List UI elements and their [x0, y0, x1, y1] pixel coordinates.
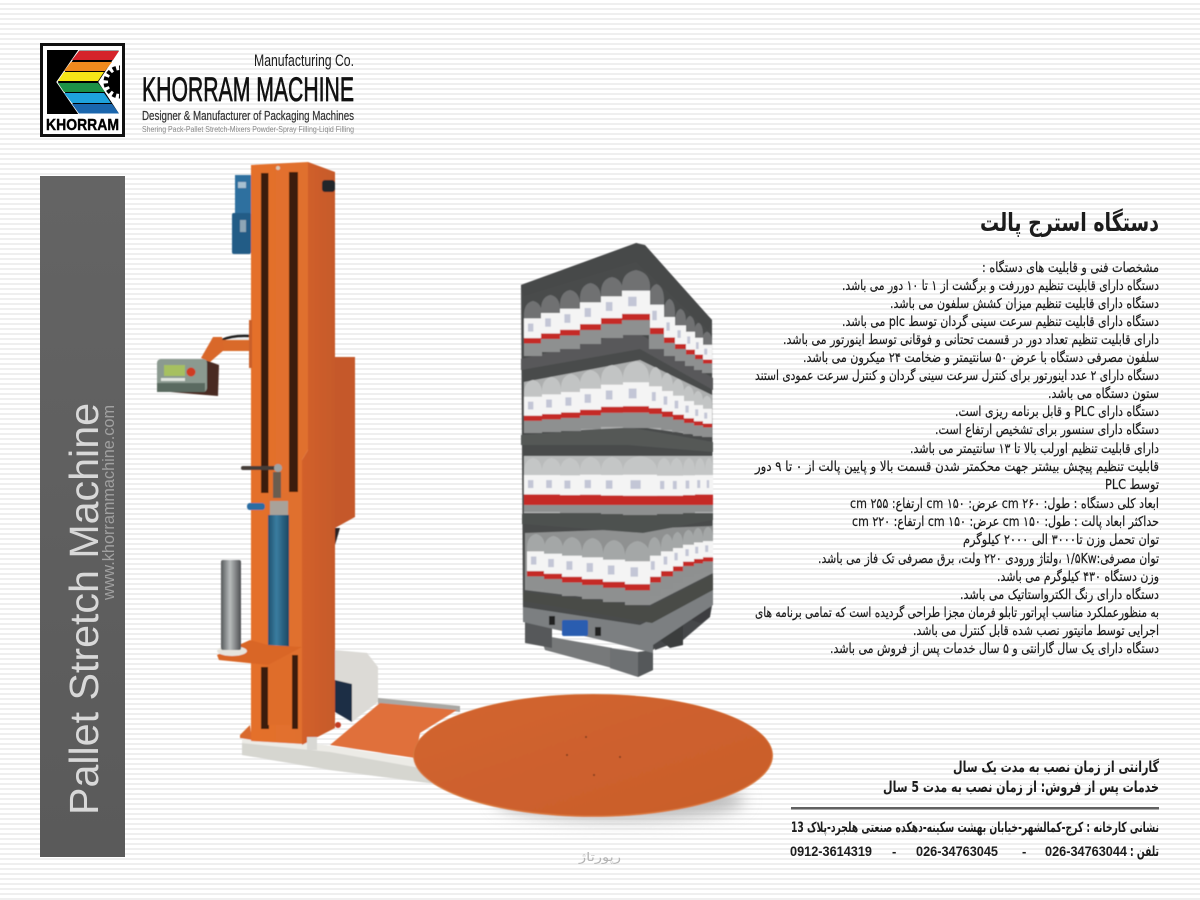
specifications text: دستگاه دارای PLC و قابل برنامه ریزی است.	[955, 403, 1159, 420]
company name block: Designer & Manufacturer of Packaging Machines	[142, 109, 354, 123]
base bracket	[307, 737, 317, 750]
vertical website: www.khorrammachine.com	[99, 405, 118, 601]
vertical title: Pallet Stretch Machine	[61, 403, 107, 815]
company name block: KHORRAM MACHINE	[142, 71, 354, 109]
pallet of bottles	[521, 243, 713, 677]
machine	[157, 162, 773, 820]
company name block	[142, 51, 354, 134]
warranty text	[883, 758, 1159, 797]
tension handle	[241, 464, 288, 515]
specifications text: دستگاه دارای ۲ عدد اینورتور برای کنترل سرعت سینی گردان و کنترل سرعت عمودی استند	[755, 367, 1159, 384]
phone numbers: -	[1022, 844, 1026, 859]
specifications text: توسط PLC	[1105, 477, 1159, 493]
specifications text: توان تحمل وزن تا۳۰۰۰ الی ۲۰۰۰ کیلوگرم	[963, 531, 1159, 548]
tray 5	[523, 575, 713, 623]
film roll	[268, 515, 289, 649]
tray 2	[521, 331, 713, 390]
turntable	[413, 694, 773, 817]
specifications text: ستون دستگاه می باشد.	[1048, 385, 1159, 402]
tier 2 bottles	[524, 360, 712, 437]
specifications text: دستگاه دارای رنگ الکترواستاتیک می باشد.	[960, 586, 1159, 603]
stack backing	[521, 243, 713, 650]
column side	[302, 162, 335, 745]
rear panel box	[335, 357, 355, 528]
specifications text	[754, 259, 1159, 657]
specifications text: توان مصرفی:۱/۵Kw ،ولتاژ ورودی ۲۲۰ ولت، برق مصرفی تک فاز می باشد.	[818, 551, 1159, 567]
tier 4 bottles	[525, 526, 713, 605]
company name block: Manufacturing Co.	[254, 51, 354, 70]
rear rail strip	[378, 698, 460, 712]
tier 1 bottles	[524, 270, 712, 373]
top knob	[322, 180, 335, 192]
logo: KHORRAM	[46, 117, 119, 134]
column front	[251, 162, 308, 744]
motor housing	[335, 650, 378, 728]
base rail	[242, 737, 443, 785]
company name block: Shering Pack-Pallet Stretch-Mixers Powder-Spray Filling-Liqid Filling	[142, 124, 354, 134]
ramp plate	[330, 703, 457, 758]
specifications text: مشخصات فنی و قابلیت های دستگاه :	[982, 259, 1159, 276]
phone numbers: -	[892, 844, 896, 859]
column slots	[261, 173, 268, 493]
logo	[40, 43, 134, 137]
plastic pallet	[523, 590, 713, 677]
tray 3	[521, 427, 713, 452]
side panel	[40, 176, 125, 857]
top tray	[521, 243, 712, 330]
phone numbers: 026-34763045	[916, 844, 998, 859]
phone numbers: 026-34763044	[1045, 844, 1127, 859]
phone numbers: تلفن :	[1130, 844, 1159, 860]
phone numbers	[790, 844, 1159, 860]
phone numbers: 0912-3614319	[790, 844, 872, 859]
specifications text: سلفون مصرفی دستگاه با عرض ۵۰ سانتیمتر و ضخامت ۲۴ میکرون می باشد.	[803, 349, 1159, 366]
controller arm	[201, 320, 252, 368]
specifications text: قابلیت تنظیم پیچش بیشتر جهت محکمتر شدن قسمت بالا و پایین پالت از ۰ تا ۹ دور	[754, 459, 1159, 475]
specifications text: حداکثر ابعاد پالت : طول: ۱۵۰ cm عرض: ۱۵۰ cm ارتفاع: ۲۲۰ cm	[852, 514, 1159, 530]
watermark: رپورتاژ	[578, 850, 621, 865]
specifications text: ابعاد کلی دستگاه : طول: ۲۶۰ cm عرض: ۱۵۰ cm ارتفاع: ۲۵۵ cm	[850, 495, 1159, 512]
carriage plate	[268, 493, 302, 725]
steel roll holder	[217, 560, 247, 656]
roll shelf	[217, 640, 302, 665]
floor shadow	[495, 780, 745, 820]
control box	[157, 359, 219, 396]
specifications text: دستگاه دارای یک سال گارانتی و ۵ سال خدمات پس از فروش می باشد.	[830, 640, 1159, 657]
specifications text: دارای قابلیت تنظیم اورلب بالا تا ۱۳ سانتیمتر می باشد.	[910, 441, 1159, 457]
blue gear motor	[232, 175, 251, 254]
tray 4	[522, 511, 713, 533]
tier 3 bottles	[524, 456, 713, 515]
specifications text: وزن دستگاه ۴۳۰ کیلوگرم می باشد.	[997, 568, 1159, 585]
